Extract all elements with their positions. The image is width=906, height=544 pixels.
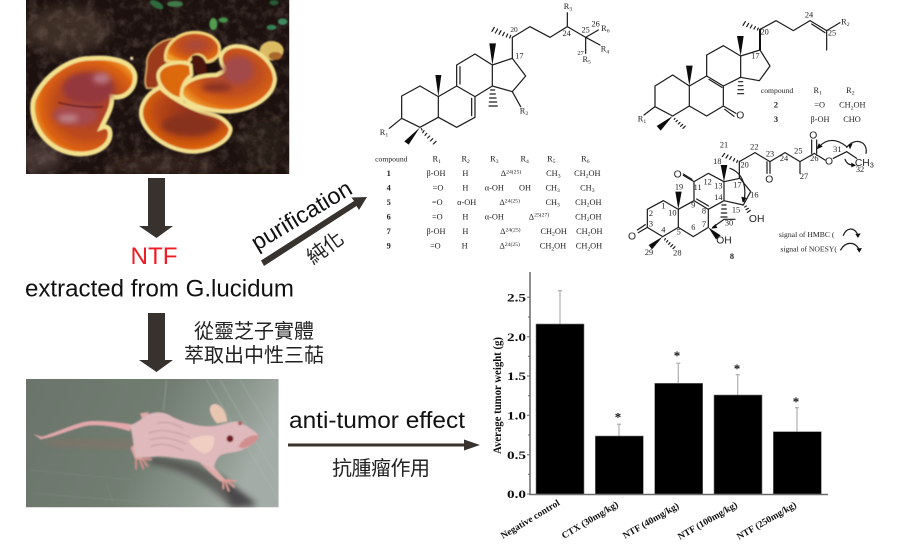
structure: compound 8 with HMBC and NOESY signals: CH [855, 158, 870, 169]
structure: compounds 2 and 3 with table: 20 [761, 28, 769, 37]
table: substituents of compounds 1, 4, 5, 6, 7, 9: 4 [387, 183, 392, 192]
table: substituents of compounds 1, 4, 5, 6, 7, 9: OH [590, 198, 602, 207]
label: extracted from G.lucidum: extracted from G.lucidum [25, 276, 294, 302]
table: substituents of compounds 1, 4, 5, 6, 7, 9: R [432, 154, 438, 163]
x axis labels: NTF (40mg/kg) [621, 501, 681, 542]
structure: lanostane skeleton with R groups [380, 2, 610, 145]
eye [227, 435, 233, 442]
structure: compound 8 with HMBC and NOESY signals: OH [716, 235, 732, 246]
table: substituents of compounds 1, 4, 5, 6, 7, 9: 6 [587, 159, 590, 165]
table: substituents of compounds 1, 4, 5, 6, 7, 9: CH [576, 242, 587, 251]
structure: compound 8 with HMBC and NOESY signals: 11 [694, 183, 702, 192]
table: substituents of compounds 1, 4, 5, 6, 7, 9: Δ [500, 227, 505, 236]
error bars [558, 291, 799, 436]
structure: lanostane skeleton with R groups: 5 [588, 60, 591, 66]
label: Chinese extraction description: 從靈芝子實體 [194, 315, 314, 344]
x axis labels: CTX (30mg/kg) [560, 499, 620, 542]
structure: lanostane skeleton with R groups: 26 [592, 20, 600, 29]
structure: compounds 2 and 3 with table: R [813, 86, 819, 95]
structure: lanostane skeleton with R groups: 20 [510, 25, 518, 34]
table: substituents of compounds 1, 4, 5, 6, 7, 9: Δ [499, 198, 505, 207]
table: substituents of compounds 1, 4, 5, 6, 7, 9: CH [574, 169, 586, 178]
structure: compound 8 with HMBC and NOESY signals: 29 [645, 248, 653, 257]
table: substituents of compounds 1, 4, 5, 6, 7, 9: OH [589, 169, 601, 178]
table: substituents of compounds 1, 4, 5, 6, 7, 9: 2 [552, 232, 555, 238]
structure: compound 8 with HMBC and NOESY signals: 16 [750, 191, 758, 200]
structure: compounds 2 and 3 with table: CHO [843, 115, 861, 124]
label: Chinese extraction description [184, 315, 324, 368]
significance markers: * [734, 361, 740, 376]
structure: compounds 2 and 3 with table: R [638, 114, 643, 123]
structure: compounds 2 and 3 with table: compound [761, 86, 793, 95]
structure: lanostane skeleton with R groups: 17 [515, 51, 523, 60]
rear haunch [140, 412, 148, 418]
table: substituents of compounds 1, 4, 5, 6, 7, 9: β-OH [426, 227, 446, 236]
table: substituents of compounds 1, 4, 5, 6, 7, 9: 2 [587, 203, 590, 209]
table: substituents of compounds 1, 4, 5, 6, 7, 9: 3 [557, 203, 560, 209]
arrow: mushroom to NTF [139, 178, 173, 238]
y axis tick labels [507, 290, 526, 501]
x axis labels: NTF (250mg/kg) [735, 500, 799, 543]
structure: compound 8 with HMBC and NOESY signals: O [809, 131, 817, 142]
table: substituents of compounds 1, 4, 5, 6, 7, 9: =O [432, 212, 443, 221]
significance markers: * [674, 348, 680, 363]
structure: compound 8 with HMBC and NOESY signals: O [628, 231, 636, 242]
structure: compounds 2 and 3 with table: 1 [819, 91, 822, 97]
structure: lanostane skeleton with R groups: 3 [569, 7, 572, 13]
structure: compound 8 with HMBC and NOESY signals: 4 [661, 226, 666, 235]
structure: compound 8 with HMBC and NOESY signals: O [825, 156, 833, 167]
table: substituents of compounds 1, 4, 5, 6, 7, 9: CH [545, 183, 557, 192]
photo: Ganoderma lucidum mushrooms [17, 0, 289, 175]
structure: compounds 2 and 3 with table: 17 [751, 52, 759, 61]
top cap [165, 32, 220, 63]
table: substituents of compounds 1, 4, 5, 6, 7, 9: 3 [557, 188, 560, 194]
structure: compound 8 with HMBC and NOESY signals: 5 [677, 227, 681, 236]
significance markers [615, 348, 799, 424]
structure: compounds 2 and 3 with table: O [736, 110, 744, 121]
structure: compound 8 with HMBC and NOESY signals: 13 [714, 182, 722, 191]
photo: nude mouse [26, 379, 279, 507]
structure: compound 8 with HMBC and NOESY signals: O [674, 169, 682, 180]
structure: compound 8 with HMBC and NOESY signals: 6 [691, 223, 695, 232]
table: substituents of compounds 1, 4, 5, 6, 7, 9: =O [433, 183, 443, 192]
table: substituents of compounds 1, 4, 5, 6, 7, 9: 1 [387, 169, 391, 178]
label: anti-tumor effect: anti-tumor effect [289, 407, 466, 433]
y axis tick labels: 0.0 [507, 487, 526, 501]
table: substituents of compounds 1, 4, 5, 6, 7, 9: CH [575, 212, 587, 221]
legs and paws [131, 445, 143, 460]
axes [527, 272, 828, 494]
arrow: purification [261, 197, 367, 266]
table: substituents of compounds 1, 4, 5, 6, 7, 9: 2 [467, 159, 470, 165]
table: substituents of compounds 1, 4, 5, 6, 7, 9: R [490, 154, 496, 163]
structure: compound 8 with HMBC and NOESY signals: 10 [668, 208, 676, 217]
structure: compounds 2 and 3 with table [638, 10, 866, 131]
label: Chinese anti-tumor effect: 抗腫瘤作用 [332, 452, 430, 481]
table: substituents of compounds 1, 4, 5, 6, 7, 9: R [520, 154, 526, 163]
leaves [150, 0, 164, 10]
structure: compound 8 with HMBC and NOESY signals: 7 [702, 220, 706, 229]
label: Chinese purification: 純化 [299, 223, 349, 270]
structure: compound 8 with HMBC and NOESY signals: 24 [780, 154, 789, 163]
y axis tick labels: 2.0 [507, 330, 526, 344]
table: substituents of compounds 1, 4, 5, 6, 7, 9: 7 [387, 227, 391, 236]
table: substituents of compounds 1, 4, 5, 6, 7, 9: =O [432, 198, 443, 207]
table: substituents of compounds 1, 4, 5, 6, 7, 9: 25(27) [534, 212, 549, 219]
label: NTF: NTF [130, 243, 178, 270]
table: substituents of compounds 1, 4, 5, 6, 7, 9: 24(25) [505, 241, 520, 248]
structure: lanostane skeleton with R groups: R [601, 24, 607, 33]
table: substituents of compounds 1, 4, 5, 6, 7, 9: α-OH [457, 198, 476, 207]
structure: compound 8 with HMBC and NOESY signals: signal of NOESY( [780, 244, 837, 253]
structure: compound 8 with HMBC and NOESY signals: 18 [713, 157, 721, 166]
table: substituents of compounds 1, 4, 5, 6, 7, 9: 2 [551, 246, 554, 252]
structure: compound 8 with HMBC and NOESY signals: 25 [794, 146, 802, 155]
table: substituents of compounds 1, 4, 5, 6, 7, 9: CH [546, 169, 558, 178]
structure: compound 8 with HMBC and NOESY signals: 8 [730, 252, 734, 261]
structure: compound 8 with HMBC and NOESY signals: 15 [732, 206, 740, 215]
table: substituents of compounds 1, 4, 5, 6, 7, 9: 5 [387, 198, 391, 207]
structure: lanostane skeleton with R groups: R [564, 2, 569, 11]
table: substituents of compounds 1, 4, 5, 6, 7, 9: CH [576, 227, 588, 236]
table: substituents of compounds 1, 4, 5, 6, 7, 9: CH [545, 198, 557, 207]
structure: compounds 2 and 3 with table: 24 [805, 10, 814, 19]
table: substituents of compounds 1, 4, 5, 6, 7, 9: CH [580, 183, 592, 192]
structure: compound 8 with HMBC and NOESY signals: 23 [766, 150, 774, 159]
significance markers: * [615, 410, 621, 424]
table: substituents of compounds 1, 4, 5, 6, 7, 9: 2 [587, 246, 590, 252]
structure: compound 8 with HMBC and NOESY signals: OH [749, 214, 764, 225]
table: substituents of compounds 1, 4, 5, 6, 7, 9: Δ [501, 169, 506, 178]
structure: lanostane skeleton with R groups: R [520, 106, 525, 115]
structure: compounds 2 and 3 with table: OH [854, 101, 866, 110]
structure: compounds 2 and 3 with table: 2 [847, 22, 850, 28]
table: substituents of compounds 1, 4, 5, 6, 7, 9: Δ [499, 242, 505, 251]
structure: compound 8 with HMBC and NOESY signals: 12 [704, 177, 712, 186]
structure: compound 8 with HMBC and NOESY signals: 3 [649, 220, 653, 229]
structure: compound 8 with HMBC and NOESY signals: signal of HMBC ( [779, 230, 835, 239]
table: substituents of compounds 1, 4, 5, 6, 7, 9: OH [554, 242, 566, 251]
table: substituents of compounds 1, 4, 5, 6, 7, 9: 24(25) [506, 168, 521, 175]
bars [536, 324, 821, 494]
table: substituents of compounds 1, 4, 5, 6, 7, 9: compound [375, 154, 408, 163]
table: substituents of compounds 1, 4, 5, 6, 7, 9: CH [540, 242, 551, 251]
table: substituents of compounds 1, 4, 5, 6, 7, 9: 1 [438, 159, 441, 165]
structure: compounds 2 and 3 with table: 3 [774, 115, 778, 124]
x axis labels: Negative control [499, 498, 562, 542]
structure: compound 8 with HMBC and NOESY signals: 19 [675, 182, 683, 191]
table: substituents of compounds 1, 4, 5, 6, 7, 9: H [462, 242, 468, 251]
y axis tick labels: 1.5 [507, 369, 526, 383]
signal arrowheads [711, 143, 856, 229]
y axis tick labels: 0.5 [507, 448, 526, 462]
structure: lanostane skeleton with R groups: 2 [525, 111, 528, 117]
table: substituents of compounds 1, 4, 5, 6, 7, 9: 2 [586, 174, 589, 180]
table: substituents of compounds 1, 4, 5, 6, 7, 9: 4 [526, 159, 529, 165]
label: purification: purification [246, 175, 356, 255]
table: substituents of compounds 1, 4, 5, 6, 7, 9: 24(25) [505, 226, 521, 233]
table: substituents of compounds 1, 4, 5, 6, 7, 9: 24(25) [505, 197, 520, 204]
middle cap [158, 63, 192, 99]
structure: compounds 2 and 3 with table: 2 [852, 91, 855, 97]
ears [210, 404, 227, 423]
table: substituents of compounds 1, 4, 5, 6, 7, 9: 3 [496, 159, 499, 165]
table: substituents of compounds 1, 4, 5, 6, 7, 9: H [462, 227, 468, 236]
right cap [180, 46, 275, 112]
table: substituents of compounds 1, 4, 5, 6, 7, 9: 6 [387, 212, 391, 221]
structure: compounds 2 and 3 with table: R [846, 86, 852, 95]
table: substituents of compounds 1, 4, 5, 6, 7, 9: R [581, 154, 587, 163]
structure: compound 8 with HMBC and NOESY signals: 27 [800, 172, 808, 181]
y axis title: Average tumor weight (g) [492, 337, 504, 454]
bar chart: average tumor weight [492, 272, 828, 543]
table: substituents of compounds 1, 4, 5, 6, 7, 9: OH [590, 242, 602, 251]
table: substituents of compounds 1, 4, 5, 6, 7, 9: OH [519, 183, 531, 192]
structure: lanostane skeleton with R groups: R [601, 45, 606, 54]
structure: compounds 2 and 3 with table: 2 [774, 101, 778, 110]
structure: compound 8 with HMBC and NOESY signals: 31 [833, 145, 841, 154]
x axis labels: NTF (100mg/kg) [676, 500, 740, 543]
structure: compound 8 with HMBC and NOESY signals: 9 [691, 201, 695, 210]
structure: compound 8 with HMBC and NOESY signals: 28 [673, 249, 681, 258]
structure: compound 8 with HMBC and NOESY signals: 3 [870, 161, 874, 170]
structure: lanostane skeleton with R groups: 4 [606, 49, 609, 55]
structure: lanostane skeleton with R groups: 27 [578, 50, 584, 57]
structure: compound 8 with HMBC and NOESY signals: 1 [661, 202, 665, 211]
structure: lanostane skeleton with R groups: 24 [563, 29, 572, 38]
structure: compounds 2 and 3 with table: β-OH [810, 115, 830, 124]
table: substituents of compounds 1, 4, 5, 6, 7, 9: OH [555, 227, 567, 236]
table: substituents of compounds 1, 4, 5, 6, 7, 9: 2 [587, 217, 590, 223]
structure: compound 8 with HMBC and NOESY signals: 26 [810, 154, 818, 163]
structure: compound 8 with HMBC and NOESY signals: 8 [702, 207, 706, 216]
table: substituents of compounds 1, 4, 5, 6, 7, 9: H [462, 212, 468, 221]
table: substituents of compounds 1, 4, 5, 6, 7, 9: R [461, 154, 467, 163]
table: substituents of compounds 1, 4, 5, 6, 7, 9 [375, 154, 603, 252]
label: Chinese extraction description: 萃取出中性三萜 [184, 339, 324, 368]
structure: compound 8 with HMBC and NOESY signals: 17 [733, 181, 741, 190]
table: substituents of compounds 1, 4, 5, 6, 7, 9: OH [590, 212, 602, 221]
table: substituents of compounds 1, 4, 5, 6, 7, 9: α-OH [485, 212, 504, 221]
table: substituents of compounds 1, 4, 5, 6, 7, 9: 2 [588, 232, 591, 238]
table: substituents of compounds 1, 4, 5, 6, 7, 9: H [462, 169, 468, 178]
lower cap [141, 87, 231, 152]
structure: compound 8 with HMBC and NOESY signals: 14 [714, 193, 723, 202]
left cap [33, 58, 135, 154]
table: substituents of compounds 1, 4, 5, 6, 7, 9: CH [575, 198, 587, 207]
structure: lanostane skeleton with R groups: 6 [607, 29, 610, 35]
arrow: anti-tumor effect [288, 440, 480, 450]
y axis tick labels: 2.5 [507, 290, 526, 304]
structure: lanostane skeleton with R groups: R [582, 55, 588, 64]
arrow: NTF to mouse [139, 313, 173, 372]
structure: compounds 2 and 3 with table: 2 [851, 105, 854, 111]
structure: compounds 2 and 3 with table: =O [814, 101, 825, 110]
structure: compounds 2 and 3 with table: 1 [643, 119, 646, 125]
table: substituents of compounds 1, 4, 5, 6, 7, 9: β-OH [426, 169, 446, 178]
structure: compound 8 with HMBC and NOESY signals: 30 [725, 218, 733, 227]
table: substituents of compounds 1, 4, 5, 6, 7, 9: 5 [553, 159, 556, 165]
table: substituents of compounds 1, 4, 5, 6, 7, 9: R [547, 154, 553, 163]
table: substituents of compounds 1, 4, 5, 6, 7, 9: CH [540, 227, 552, 236]
y axis tick labels: 1.0 [507, 408, 526, 422]
structure: compound 8 with HMBC and NOESY signals: 21 [720, 140, 728, 149]
x axis labels [499, 498, 799, 543]
structure: lanostane skeleton with R groups: 25 [582, 26, 590, 35]
structure: lanostane skeleton with R groups: R [380, 128, 385, 137]
table: substituents of compounds 1, 4, 5, 6, 7, 9: 3 [592, 188, 595, 194]
structure: compound 8 with HMBC and NOESY signals: 20 [741, 161, 749, 170]
table: substituents of compounds 1, 4, 5, 6, 7, 9: H [462, 183, 468, 192]
structure: compound 8 with HMBC and NOESY signals: O [765, 175, 773, 186]
body [129, 412, 259, 472]
structure: compound 8 with HMBC and NOESY signals [628, 131, 874, 261]
structure: compounds 2 and 3 with table: 25 [828, 29, 836, 38]
structure: compound 8 with HMBC and NOESY signals: 2 [649, 209, 653, 218]
significance markers: * [793, 394, 799, 409]
center stem shadow [190, 60, 221, 77]
structure: compounds 2 and 3 with table: CH [839, 101, 851, 110]
table: substituents of compounds 1, 4, 5, 6, 7, 9: 3 [558, 174, 561, 180]
structure: compound 8 with HMBC and NOESY signals: 32 [856, 165, 864, 174]
table: substituents of compounds 1, 4, 5, 6, 7, 9: Δ [529, 212, 534, 221]
structure: compounds 2 and 3 with table: R [841, 17, 847, 26]
structure: compound 8 with HMBC and NOESY signals: 22 [750, 142, 758, 151]
back cap [145, 38, 173, 88]
table: substituents of compounds 1, 4, 5, 6, 7, 9: OH [591, 227, 603, 236]
tail [33, 421, 131, 439]
table: substituents of compounds 1, 4, 5, 6, 7, 9: =O [430, 242, 441, 251]
table: substituents of compounds 1, 4, 5, 6, 7, 9: 9 [387, 242, 391, 251]
table: substituents of compounds 1, 4, 5, 6, 7, 9: α-OH [485, 183, 504, 192]
structure: lanostane skeleton with R groups: 1 [385, 133, 388, 139]
